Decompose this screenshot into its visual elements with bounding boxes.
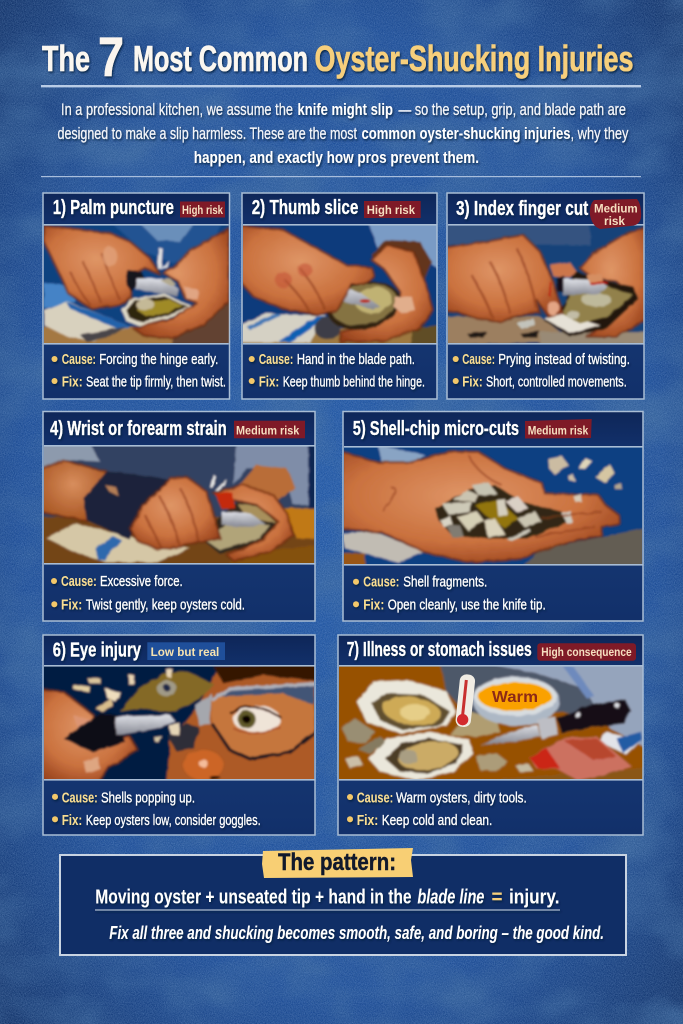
risk badge: High consequence xyxy=(541,647,632,659)
formula line: = xyxy=(492,886,502,908)
fix: Seat the tip firmly, then twist. xyxy=(86,375,226,391)
cause: Cause: xyxy=(357,790,393,806)
fix xyxy=(347,813,492,829)
fix: Fix: xyxy=(259,375,279,391)
fix xyxy=(51,598,245,614)
formula line: Moving oyster + unseated tip + hand in the xyxy=(95,886,412,908)
risk badge: High risk xyxy=(182,205,223,217)
cause xyxy=(52,352,218,368)
heading: 4) Wrist or forearm strain xyxy=(50,418,227,440)
intro text: designed to make a slip harmless. These are the most xyxy=(58,125,357,143)
illustration: warm oysters, dirty knife xyxy=(337,663,647,783)
label: Warm: Warm xyxy=(492,689,538,706)
cause: Cause: xyxy=(62,790,98,806)
fix xyxy=(453,375,627,391)
cause: Hand in the blade path. xyxy=(297,352,415,368)
cause: Shell fragments. xyxy=(403,575,487,591)
illustration: hands opening an oyster, palm puncture xyxy=(40,222,233,345)
cause xyxy=(347,790,527,806)
formula line: injury. xyxy=(509,886,560,908)
intro text: happen, and exactly how pros prevent them. xyxy=(194,149,479,167)
illustration: hand holding shell chips xyxy=(342,445,645,568)
risk badge: High risk xyxy=(367,205,416,217)
risk badge xyxy=(537,643,636,661)
illustration: index finger cut xyxy=(443,222,650,345)
title: 7 xyxy=(98,25,124,88)
cause: Shells popping up. xyxy=(101,790,195,806)
heading: 1) Palm puncture xyxy=(53,197,174,219)
heading: 5) Shell-chip micro-cuts xyxy=(353,418,519,440)
heading: 3) Index finger cut xyxy=(456,198,589,220)
risk badge xyxy=(364,201,421,218)
panel: 2 thumb slice xyxy=(240,193,440,399)
fix: Fix: xyxy=(62,375,83,391)
intro text xyxy=(58,101,629,167)
fix xyxy=(52,375,226,391)
panel: the pattern xyxy=(60,848,626,955)
illustration: braced wrist and oyster xyxy=(40,443,320,567)
intro text: In a professional kitchen, we assume the xyxy=(61,101,293,119)
panel: 7 illness or stomach issues xyxy=(337,635,647,835)
risk badge xyxy=(147,642,225,660)
fix: Fix: xyxy=(61,598,82,614)
fix: Keep oysters low, consider goggles. xyxy=(86,813,261,829)
heading: 6) Eye injury xyxy=(53,640,142,662)
cause: Forcing the hinge early. xyxy=(99,352,218,368)
cause: Cause: xyxy=(61,574,97,590)
fix: Keep thumb behind the hinge. xyxy=(283,375,425,391)
fix: Fix: xyxy=(357,813,378,829)
risk badge: Medium risk xyxy=(528,425,589,437)
risk badge: Medium xyxy=(594,203,638,215)
illustration: thumb in blade path xyxy=(240,222,440,345)
heading: 2) Thumb slice xyxy=(252,197,358,219)
cause xyxy=(353,575,487,591)
risk badge xyxy=(234,421,305,438)
fix: Fix: xyxy=(462,375,483,391)
formula line: blade line xyxy=(417,886,484,908)
risk badge: Low but real xyxy=(151,647,219,659)
fix xyxy=(353,598,546,614)
panel: 1 palm puncture xyxy=(40,193,233,399)
fix: Open cleanly, use the knife tip. xyxy=(388,598,546,614)
cause: Cause: xyxy=(259,352,293,368)
cause: Cause: xyxy=(363,575,399,591)
fix: Fix: xyxy=(363,598,384,614)
panel: 3 index finger cut xyxy=(443,193,650,399)
fix xyxy=(249,375,425,391)
risk badge xyxy=(590,199,641,229)
cause: Excessive force. xyxy=(100,574,183,590)
panel: 5 shell-chip micro-cuts xyxy=(342,412,645,621)
tag: the pattern: The pattern: xyxy=(278,849,396,876)
cause xyxy=(453,352,630,368)
fix xyxy=(52,813,261,829)
risk badge xyxy=(525,419,592,438)
heading: 7) Illness or stomach issues xyxy=(347,639,532,661)
risk badge: Medium risk xyxy=(236,425,300,437)
risk badge xyxy=(180,202,225,218)
fix: Fix: xyxy=(62,813,82,829)
cause: Prying instead of twisting. xyxy=(498,352,630,368)
cause: Warm oysters, dirty tools. xyxy=(396,790,527,806)
title xyxy=(42,25,634,88)
intro text: , why they xyxy=(570,125,629,143)
fix: Short, controlled movements. xyxy=(486,375,627,391)
title: Most Common xyxy=(133,38,308,79)
intro text: knife might slip xyxy=(298,101,393,119)
illustration: shell flying at goggles xyxy=(40,663,320,783)
cause xyxy=(52,790,195,806)
panel: 6 eye injury xyxy=(40,635,320,835)
cause xyxy=(51,574,183,590)
intro text: common oyster-shucking injuries xyxy=(362,125,570,143)
title: The xyxy=(42,38,90,79)
cause: Cause: xyxy=(62,352,96,368)
risk badge: risk xyxy=(604,216,626,228)
panel: 4 wrist or forearm strain xyxy=(40,412,320,621)
fix: Keep cold and clean. xyxy=(382,813,492,829)
fix: Twist gently, keep oysters cold. xyxy=(86,598,245,614)
cause xyxy=(249,352,415,368)
cause: Cause: xyxy=(462,352,495,368)
